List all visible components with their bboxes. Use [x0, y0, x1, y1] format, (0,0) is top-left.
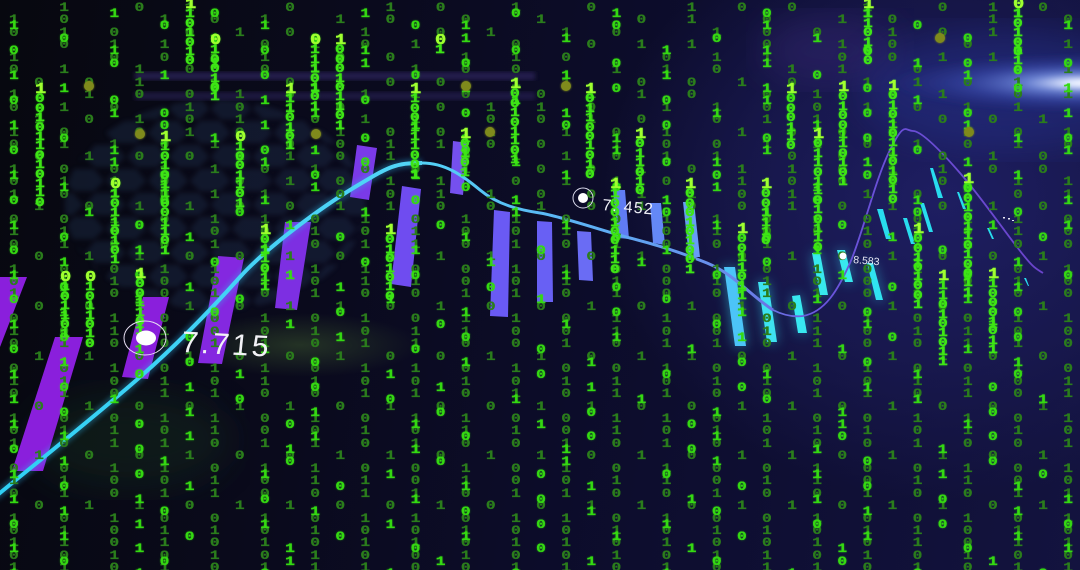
binary rain: dense bright streams: 0100101 — [210, 32, 221, 104]
binary rain: dense bright streams: 01 — [435, 32, 446, 57]
binary rain: dense bright streams: 1010101101010 — [888, 78, 899, 207]
binary rain: dense bright streams: 1000101101 — [335, 32, 346, 133]
cyan bars — [724, 168, 1029, 346]
binary rain: dense bright streams: 1001011010110 — [35, 81, 46, 210]
purple bars — [0, 222, 311, 471]
binary rain: dense bright streams: 1001110 — [761, 176, 772, 248]
marker: 8.583 — [840, 252, 880, 268]
binary rain: dense bright streams: 1011011 — [260, 222, 271, 294]
cyan bar glow — [724, 250, 883, 346]
binary rain: dense bright streams: 1101011001101 — [160, 129, 171, 258]
binary rain: dense bright streams: 1001101 — [135, 266, 146, 338]
marker: 7.452: 7. 452 — [602, 197, 655, 218]
binary rain: dense bright streams: 1001011010011 — [963, 171, 974, 300]
tiny distant marker — [1003, 217, 1014, 221]
marker: 8.583: 8.583 — [853, 254, 880, 268]
binary rain: dense bright streams: 100101001 — [913, 221, 924, 312]
binary rain: dense bright streams: 1110101011 — [938, 268, 949, 369]
binary rain: dense bright streams: 1011001010 — [585, 81, 596, 182]
binary rain: dense bright streams: 1011010 — [635, 126, 646, 198]
marker: 7.715: 7.715 — [180, 326, 273, 364]
binary rain: dense bright streams: 10011011 — [737, 221, 748, 303]
binary rain: dense bright streams: 1000101001 — [685, 176, 696, 277]
binary rain: dense bright streams: 01011010 — [85, 269, 96, 351]
binary rain: dense bright streams: 10101010 — [385, 222, 396, 304]
binary rain: dense bright streams: 01110101 — [310, 32, 321, 114]
binary rain: dense bright streams: 100101101 — [510, 76, 521, 167]
binary rain: dense bright streams: 1011011010110 — [813, 126, 824, 255]
binary rain: dense bright streams: 10101 — [460, 126, 471, 180]
binary rain: dense bright streams: 01001101 — [235, 129, 246, 211]
marker: 7.452 — [573, 188, 655, 218]
violet-blue bars — [350, 141, 700, 317]
binary rain: dense bright streams: 1100111001 — [410, 81, 421, 182]
binary rain: dense bright streams: 0101101 — [60, 269, 71, 341]
binary rain: dense bright streams: 1110101 — [285, 81, 296, 153]
marker: 7.715 — [124, 321, 273, 364]
binary rain: dense bright streams: 010110101 — [110, 176, 121, 267]
binary rain: dense bright streams: 1100100110 — [610, 176, 621, 277]
binary rain: dense bright streams: 110001011 — [988, 266, 999, 357]
binary rain: dense bright streams: 10100110101 — [838, 79, 849, 189]
binary rain: dense bright streams: 1000110 — [786, 81, 797, 153]
yellowish head glyphs — [84, 81, 94, 91]
